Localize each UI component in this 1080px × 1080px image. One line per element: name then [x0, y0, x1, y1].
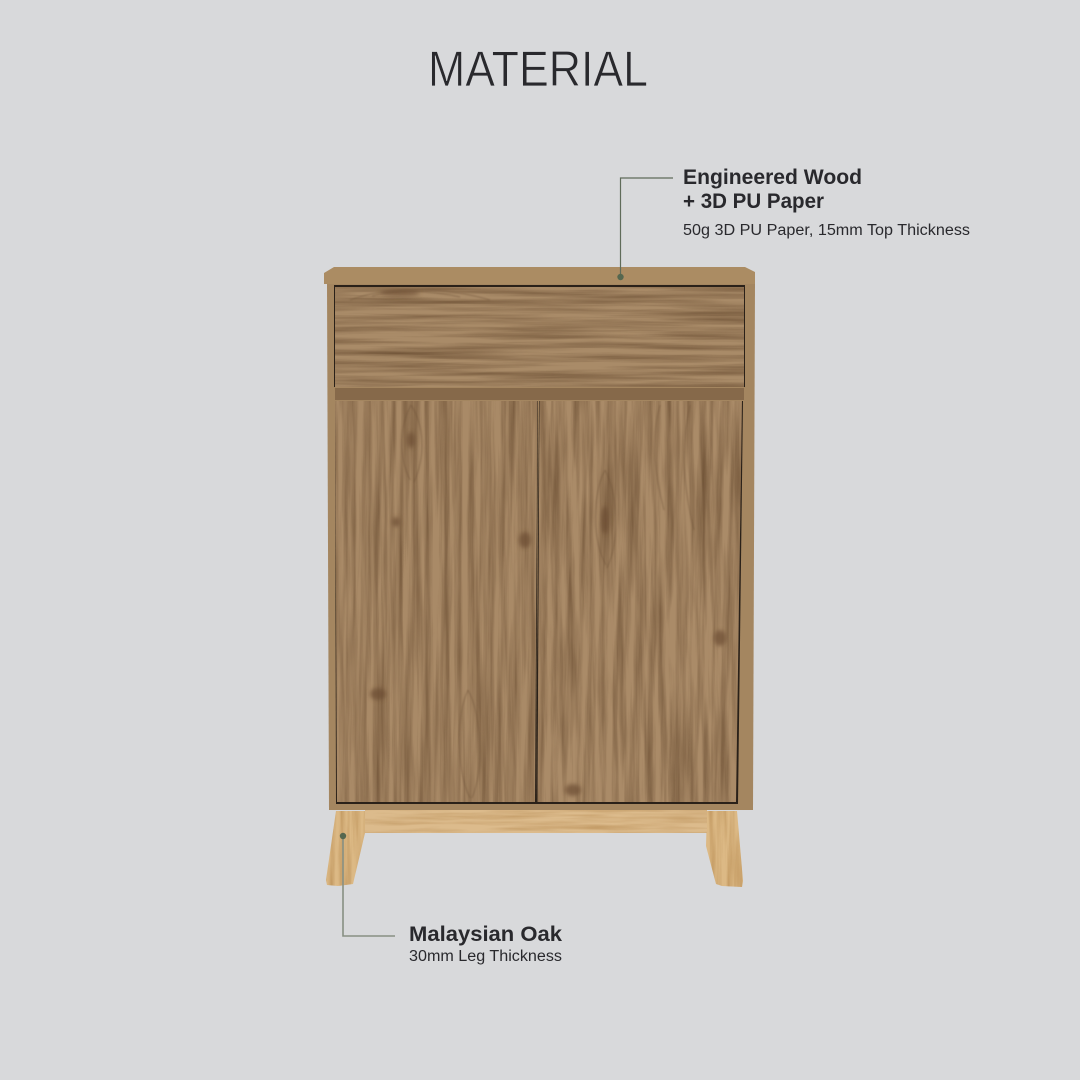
callout: engineered wood	[617, 166, 970, 280]
leader line	[343, 836, 395, 936]
leader line	[620, 178, 673, 277]
cabinet top	[324, 267, 755, 284]
left leg	[326, 811, 365, 886]
callout heading: Malaysian Oak	[409, 923, 562, 946]
wood knots	[370, 290, 726, 796]
marker dot	[617, 274, 624, 280]
callout detail: 50g 3D PU Paper, 15mm Top Thickness	[683, 222, 970, 239]
callout: malaysian oak	[340, 833, 562, 965]
drawer front	[334, 285, 745, 387]
carcass	[327, 284, 755, 810]
rail under drawer	[335, 388, 744, 400]
callout heading: + 3D PU Paper	[683, 190, 824, 213]
callout detail: 30mm Leg Thickness	[409, 948, 562, 965]
wood ring figures	[350, 290, 694, 798]
marker dot	[340, 833, 346, 839]
left door	[335, 401, 538, 804]
right leg	[706, 811, 743, 887]
right door	[536, 401, 743, 804]
cabinet	[324, 267, 755, 887]
callout heading: Engineered Wood	[683, 166, 862, 189]
apron rail	[365, 810, 707, 833]
title: MATERIAL	[428, 41, 648, 97]
